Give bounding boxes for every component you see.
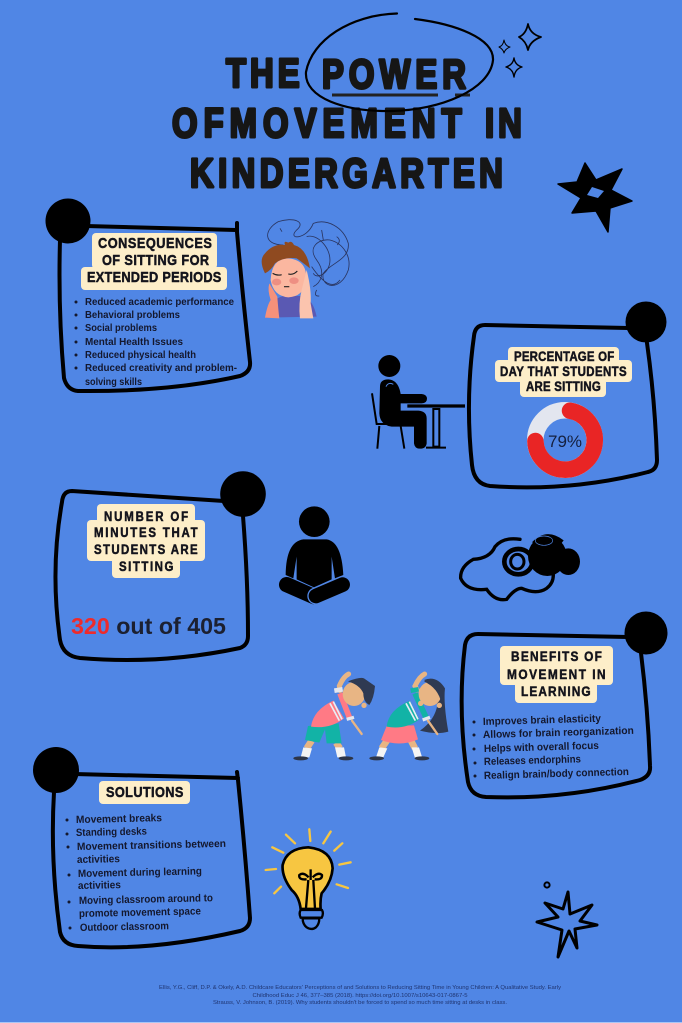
panel heading: NUMBER OF [104, 509, 188, 524]
list of solutions: Moving classroom around to [79, 892, 213, 907]
panel heading: MOVEMENT IN [507, 666, 606, 682]
list of consequences: Reduced academic performance [85, 296, 234, 308]
panel frame [60, 223, 250, 391]
icon: sparkles [499, 24, 541, 77]
panel frame [462, 634, 650, 797]
panel heading: CONSEQUENCES [98, 234, 212, 251]
donut chart 79%: 79% [548, 432, 582, 451]
list of benefits: Helps with overall focus [484, 740, 599, 755]
panel heading: STUDENTS ARE [94, 542, 198, 557]
title: IN [485, 99, 522, 146]
list of benefits: Allows for brain reorganization [483, 725, 634, 741]
icon: scribble cloud [461, 536, 580, 600]
panel heading [87, 504, 205, 578]
panel heading: SOLUTIONS [106, 783, 183, 800]
list of consequences: Behavioral problems [85, 309, 180, 321]
list of benefits: Releases endorphins [484, 753, 581, 768]
list of solutions: Movement transitions between [77, 838, 226, 853]
list of solutions: activities [77, 853, 120, 866]
list of solutions: Movement breaks [76, 812, 162, 826]
list of consequences: Mental Health Issues [85, 336, 183, 348]
list of solutions: Outdoor classroom [80, 920, 169, 934]
title [172, 49, 522, 196]
panel heading: BENEFITS OF [511, 648, 602, 664]
list of solutions: Standing desks [76, 826, 147, 839]
panel heading: OF SITTING FOR [102, 251, 209, 268]
panel heading: DAY THAT STUDENTS [500, 364, 627, 379]
title: POWER [322, 50, 466, 97]
panel frame [55, 491, 248, 660]
icon: student sitting at desk [372, 355, 465, 449]
panel frame [469, 325, 657, 487]
list of benefits: Realign brain/body connection [484, 766, 629, 782]
panel: consequences of sitting [46, 198, 250, 391]
title: OFMOVEMENT [172, 99, 462, 146]
child two [369, 674, 448, 760]
icon: children stretching [293, 674, 448, 760]
citations [159, 985, 561, 1006]
list of benefits: Improves brain elasticity [483, 713, 601, 728]
icon: cross-legged person [286, 506, 343, 597]
panel heading [99, 781, 190, 804]
panel: solutions [33, 747, 250, 947]
statistic: 320 out of 405: 320 out of 405 [71, 613, 226, 639]
list of consequences: Social problems [85, 322, 157, 334]
panel marker dot [46, 198, 90, 244]
panel heading [500, 646, 613, 703]
list of solutions: Movement during learning [78, 865, 202, 880]
panel marker dot [33, 747, 79, 793]
panel marker dot [624, 612, 668, 654]
list of consequences: solving skills [85, 376, 142, 388]
list of benefits [472, 713, 634, 782]
panel heading: PERCENTAGE OF [514, 349, 615, 364]
panel heading [81, 233, 227, 290]
oval around POWER [306, 14, 493, 111]
list of solutions: activities [78, 879, 121, 892]
list of consequences: Reduced creativity and problem- [85, 362, 237, 374]
panel: benefits of movement [462, 612, 668, 797]
donut chart 79% [535, 410, 595, 470]
panel heading [495, 347, 632, 397]
panel marker dot [626, 302, 666, 342]
child one [293, 674, 375, 760]
panel heading: SITTING [119, 559, 173, 574]
citations: Ellis, Y.G., Cliff, D.P. & Okely, A.D. Childcare Educators' Perceptions of and Solutions to Reducing Sitting Time in Young Children: A Qualitative Study. Early [159, 985, 561, 991]
panel heading: EXTENDED PERIODS [87, 268, 221, 285]
title: KINDERGARTEN [190, 149, 503, 196]
list of solutions: promote movement space [79, 905, 201, 920]
icon: stressed child with scribbles [262, 220, 349, 318]
icon: scribbled star top right [558, 163, 632, 232]
panel marker dot [220, 471, 266, 517]
citations: Childhood Educ J 46, 377–385 (2018). https://doi.org/10.1007/s10643-017-0867-5 [252, 993, 468, 999]
panel: minutes sitting [55, 471, 266, 660]
list of solutions [66, 812, 226, 934]
citations: Strauss, V. Johnson, B. (2019). Why students shouldn't be forced to spend so much time sitting at desks in class. [213, 1000, 507, 1006]
list of consequences [74, 296, 237, 388]
panel heading: MINUTES THAT [94, 525, 198, 540]
icon: light bulb [266, 829, 351, 929]
panel frame [53, 772, 250, 947]
panel heading: LEARNING [521, 683, 591, 699]
panel: percentage of day sitting [469, 302, 666, 487]
icon: outlined star bottom right [537, 882, 597, 957]
panel heading: ARE SITTING [526, 379, 601, 394]
list of consequences: Reduced physical health [85, 349, 196, 361]
title: THE [226, 49, 300, 96]
